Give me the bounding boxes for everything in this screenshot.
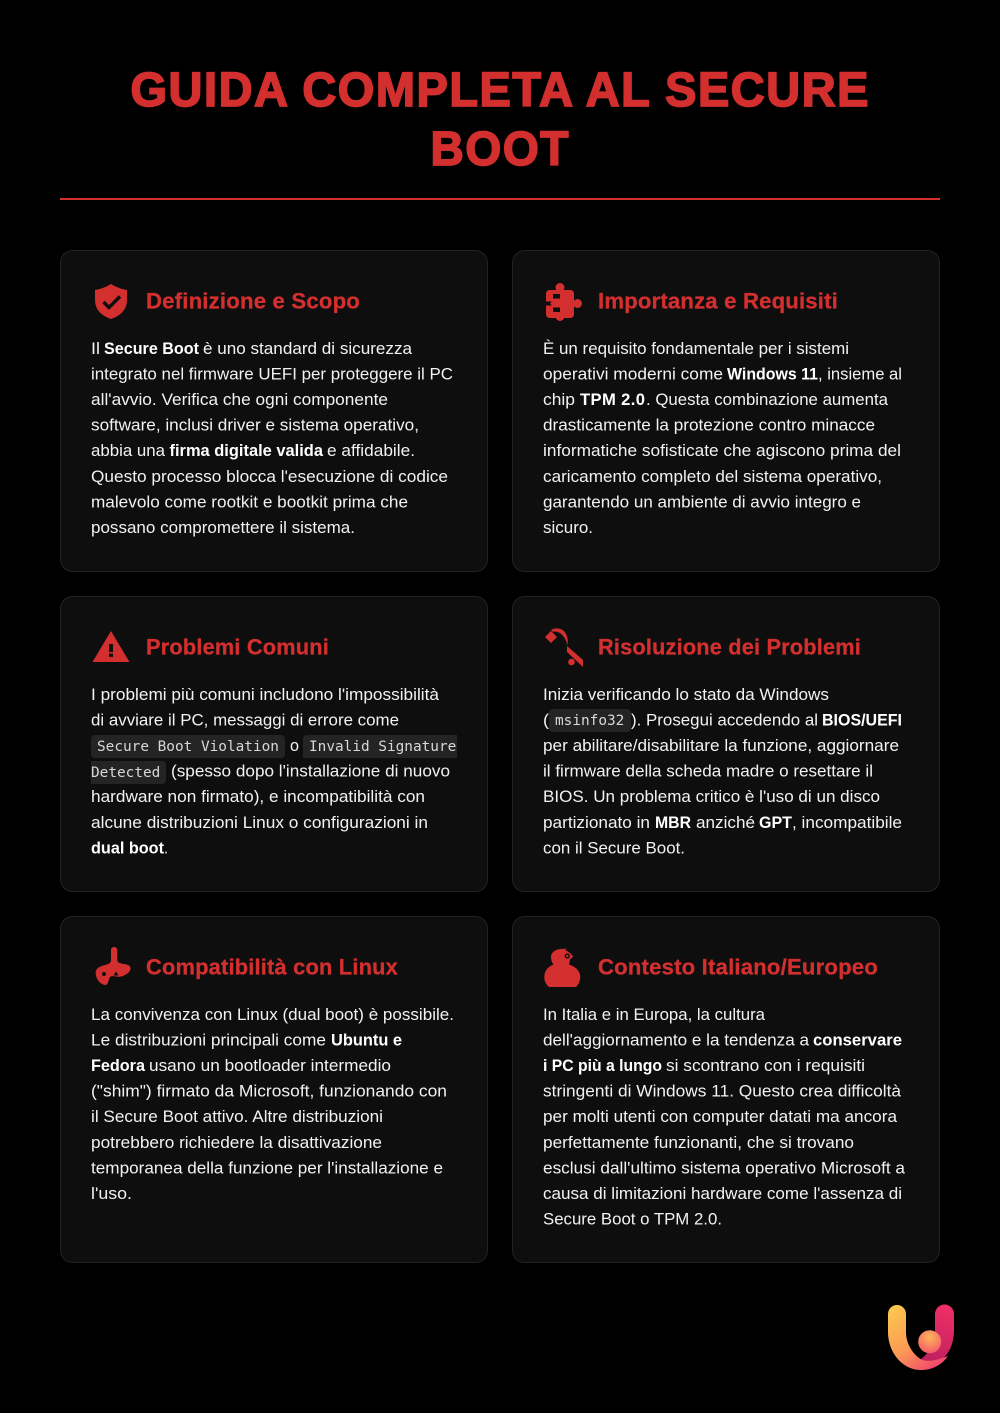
body text: abbia una [91, 441, 166, 460]
body text: i PC più a lungo [543, 1056, 662, 1075]
body text [543, 685, 902, 857]
body text: BIOS/UEFI [822, 710, 902, 729]
body text: ). Prosegui accedendo al [631, 710, 818, 729]
body text: malevolo come rootkit e bootkit prima che [91, 492, 408, 511]
code chip: Invalid Signature Detected [91, 735, 457, 784]
body text: Secure Boot o TPM 2.0. [543, 1210, 722, 1229]
body text: dual boot [91, 838, 164, 857]
body text: dell'aggiornamento e la tendenza a [543, 1030, 810, 1049]
body text: informatiche sofisticate che agiscono prima del [543, 441, 901, 460]
body text: GPT [759, 813, 792, 832]
heading: Contesto Italiano/Europeo [598, 954, 878, 980]
panel: Problemi Comuni [60, 596, 488, 892]
body text: si scontrano con i requisiti [666, 1056, 865, 1075]
icon: shield with check [95, 284, 127, 319]
body text: BIOS. Un problema critico è l'uso di un disco [543, 787, 880, 806]
body text: per abilitare/disabilitare la funzione, aggiornare [543, 736, 899, 755]
body text: l'uso. [91, 1184, 132, 1203]
body text: sicuro. [543, 518, 593, 537]
icon: puzzle piece [545, 283, 582, 321]
panel: Contesto Italiano/Europeo [512, 916, 940, 1262]
body text: e affidabile. [327, 441, 415, 460]
body text: software, inclusi driver e sistema operativo, [91, 416, 419, 435]
body text: , incompatibile [792, 813, 902, 832]
heading: Definizione e Scopo [146, 288, 360, 314]
code chip: Secure Boot Violation: Secure Boot Violation [97, 739, 279, 755]
heading: Compatibilità con Linux [146, 954, 398, 980]
body text: I problemi più comuni includono l'impossibilità [91, 685, 440, 704]
body text: drasticamente la protezione contro minacce [543, 416, 875, 435]
icon: logo [888, 1304, 954, 1370]
code chip: Invalid Signature Detected: Invalid Signature [309, 739, 456, 755]
body text [543, 339, 902, 537]
body text: causa di limitazioni hardware come l'assenza di [543, 1184, 902, 1203]
body text: il Secure Boot attivo. Altre distribuzioni [91, 1107, 383, 1126]
body text: stringenti di Windows 11. Questo crea difficoltà [543, 1082, 902, 1101]
body text: di avviare il PC, messaggi di errore come [91, 710, 399, 729]
body text: Il [91, 339, 100, 358]
icon: duck [544, 948, 580, 987]
body text: potrebbero richiedere la disattivazione [91, 1133, 382, 1152]
body text: per molti utenti con computer datati ma ancora [543, 1107, 898, 1126]
body text: garantendo un ambiente di avvio integro e [543, 492, 861, 511]
body text: Ubuntu e [331, 1030, 402, 1049]
body text: partizionato in [543, 813, 650, 832]
title: GUIDA COMPLETA AL SECURE [130, 64, 870, 117]
body text: Secure Boot [104, 339, 199, 358]
code chip: msinfo32: msinfo32 [555, 713, 624, 729]
title [130, 64, 870, 176]
heading: Importanza e Requisiti [598, 288, 838, 314]
body text: chip [543, 390, 575, 409]
body text: perfettamente funzionanti, che si trovano [543, 1133, 854, 1152]
body text: ("shim") firmato da Microsoft, funzionando con [91, 1082, 447, 1101]
code chip: msinfo32 [549, 709, 631, 732]
panel: Importanza e Requisiti [512, 250, 940, 572]
body text: con il Secure Boot. [543, 838, 685, 857]
body text: TPM 2.0 [580, 390, 645, 409]
body text: La convivenza con Linux (dual boot) è possibile. [91, 1005, 454, 1024]
body text: il firmware della scheda madre o resettare il [543, 762, 873, 781]
body text: firma digitale valida [170, 441, 324, 460]
icon: warning triangle [92, 631, 130, 662]
body text: hardware non firmato), e incompatibilità con [91, 787, 425, 806]
body text: conservare [813, 1030, 902, 1049]
body text [91, 685, 457, 857]
body text: . [164, 838, 168, 857]
body text: Le distribuzioni principali come [91, 1030, 326, 1049]
body text [91, 339, 453, 537]
body text: operativi moderni come [543, 364, 723, 383]
icon: wrench [545, 628, 583, 667]
body text: È un requisito fondamentale per i sistemi [543, 339, 849, 358]
body text: caricamento completo del sistema operativo, [543, 467, 882, 486]
body text: Fedora [91, 1056, 146, 1075]
body text: Questo processo blocca l'esecuzione di codice [91, 467, 448, 486]
body text [543, 1005, 906, 1229]
body text: alcune distribuzioni Linux o configurazioni in [91, 813, 428, 832]
body text: MBR [655, 813, 691, 832]
code chip: Invalid Signature Detected: Detected [91, 765, 160, 781]
body text: esclusi dall'ultimo sistema operativo Microsoft a [543, 1158, 906, 1177]
body text: all'avvio. Verifica che ogni componente [91, 390, 388, 409]
body text: usano un bootloader intermedio [149, 1056, 391, 1075]
title: BOOT [430, 123, 570, 176]
panel: Compatibilità con Linux [60, 916, 488, 1262]
body text: . Questa combinazione aumenta [646, 390, 889, 409]
body text: , insieme al [818, 364, 902, 383]
icon: Linux penguin [96, 947, 131, 985]
code chip: Secure Boot Violation [91, 735, 285, 758]
panel: Risoluzione dei Problemi [512, 596, 940, 892]
body text: integrato nel firmware UEFI per proteggere il PC [91, 364, 453, 383]
body text: temporanea della funzione per l'installazione e [91, 1158, 443, 1177]
body text: possano compromettere il sistema. [91, 518, 355, 537]
body text: o [290, 736, 299, 755]
body text: (spesso dopo l'installazione di nuovo [171, 762, 450, 781]
heading: Risoluzione dei Problemi [598, 634, 861, 660]
body text: Inizia verificando lo stato da Windows [543, 685, 829, 704]
heading: Problemi Comuni [146, 634, 329, 660]
body text: In Italia e in Europa, la cultura [543, 1005, 766, 1024]
panel: Definizione e Scopo [60, 250, 488, 572]
body text: anziché [696, 813, 755, 832]
body text: Windows 11 [727, 364, 818, 383]
body text: ( [543, 710, 550, 729]
body text: è uno standard di sicurezza [203, 339, 413, 358]
body text [91, 1005, 454, 1203]
